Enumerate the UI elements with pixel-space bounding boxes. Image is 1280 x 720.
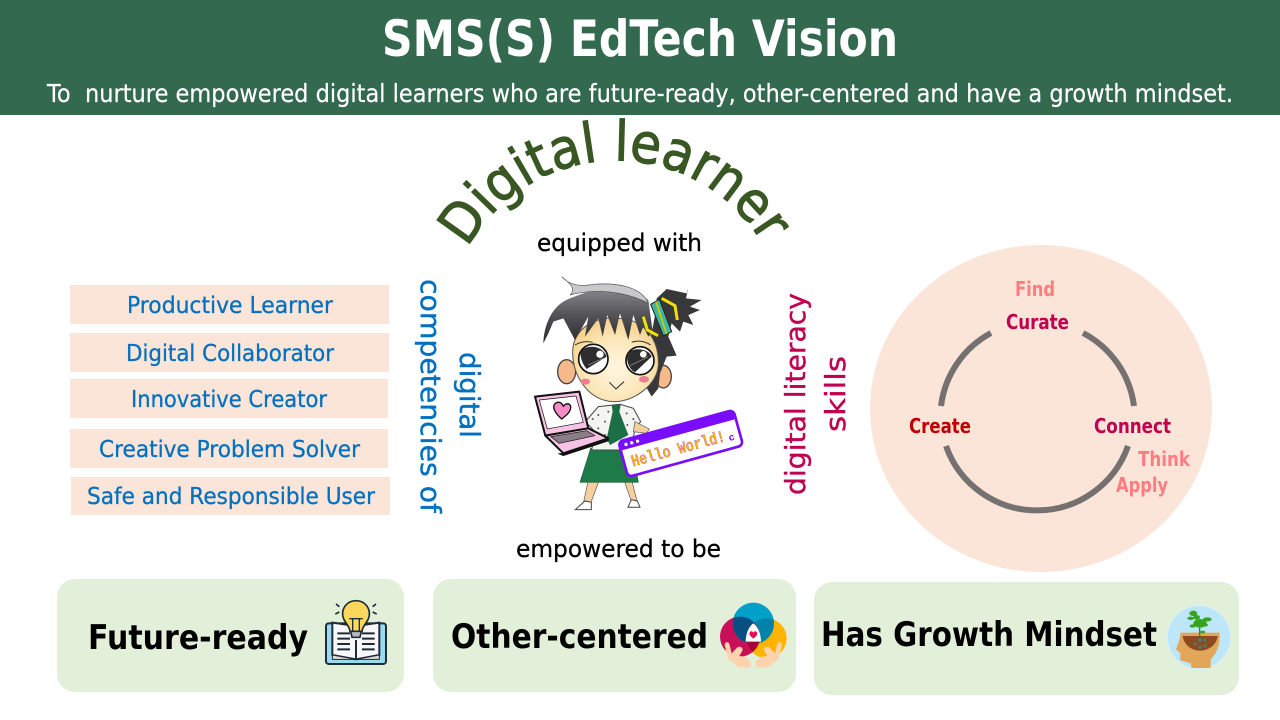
hair clip [643, 298, 677, 336]
hair [543, 289, 653, 343]
laptop [535, 392, 608, 456]
text: empowered to be: empowered to be [516, 535, 721, 563]
text: equipped with: equipped with [537, 229, 702, 257]
vertical label: digital competencies of: competencies of [414, 279, 447, 514]
icon: venn diagram with hands [720, 603, 787, 667]
eyes [575, 341, 654, 375]
shirt [585, 404, 649, 450]
competency: Innovative Creator: Innovative Creator [131, 387, 327, 413]
skill labels: Find [1015, 277, 1055, 301]
competency: Digital Collaborator [70, 333, 389, 372]
face [573, 318, 658, 402]
illustration: girl with laptop [535, 277, 743, 510]
card: Other-centered: Other-centered [451, 617, 708, 657]
skill labels: Apply [1116, 473, 1168, 497]
code window with Hello World [618, 410, 743, 477]
competency: Digital Collaborator: Digital Collaborator [126, 341, 334, 367]
vertical label: digital literacy skills: skills [819, 356, 852, 432]
vertical label: digital literacy skills: digital literacy [779, 293, 812, 495]
skill labels: Curate [1006, 310, 1069, 334]
code window with Hello World: c [727, 432, 736, 444]
panel: literacy skills cycle [870, 245, 1212, 572]
competency: Creative Problem Solver [70, 429, 388, 468]
panel: digital competencies list [70, 285, 390, 515]
vertical label: digital literacy skills [779, 293, 852, 495]
ears [558, 360, 671, 388]
header banner [0, 0, 1280, 115]
card: Future-ready [57, 579, 404, 692]
vertical label: digital competencies of [414, 279, 486, 514]
back hair and ponytail [645, 288, 702, 397]
competency: Productive Learner [70, 285, 389, 324]
skill labels [909, 277, 1191, 497]
card: Future-ready: Future-ready [88, 618, 308, 658]
competency: Safe and Responsible User [71, 477, 390, 515]
competency: Innovative Creator [70, 379, 388, 418]
skill labels: Connect [1094, 414, 1171, 438]
card: Has Growth Mindset [814, 582, 1239, 695]
icon: plant growing from head [1167, 606, 1231, 669]
competency: Creative Problem Solver: Creative Problem Solver [99, 437, 361, 463]
competency: Productive Learner: Productive Learner [127, 293, 334, 319]
competency: Safe and Responsible User: Safe and Responsible User [87, 484, 376, 510]
skill labels: Create [909, 414, 971, 438]
vertical label: digital competencies of: digital [453, 352, 486, 438]
curved heading: Digital learner: Digital learner [436, 118, 789, 244]
legs and shoes [575, 480, 640, 510]
skirt [580, 445, 638, 482]
icon: book with light bulb [326, 601, 386, 664]
mouth and blush [581, 376, 649, 389]
code window with Hello World: Hello World! [629, 428, 728, 472]
skill labels: Think [1138, 447, 1191, 471]
card: Has Growth Mindset: Has Growth Mindset [821, 615, 1157, 655]
cycle ring [941, 333, 1134, 510]
card: Other-centered [433, 579, 796, 692]
title: SMS(S) EdTech Vision [382, 10, 898, 68]
